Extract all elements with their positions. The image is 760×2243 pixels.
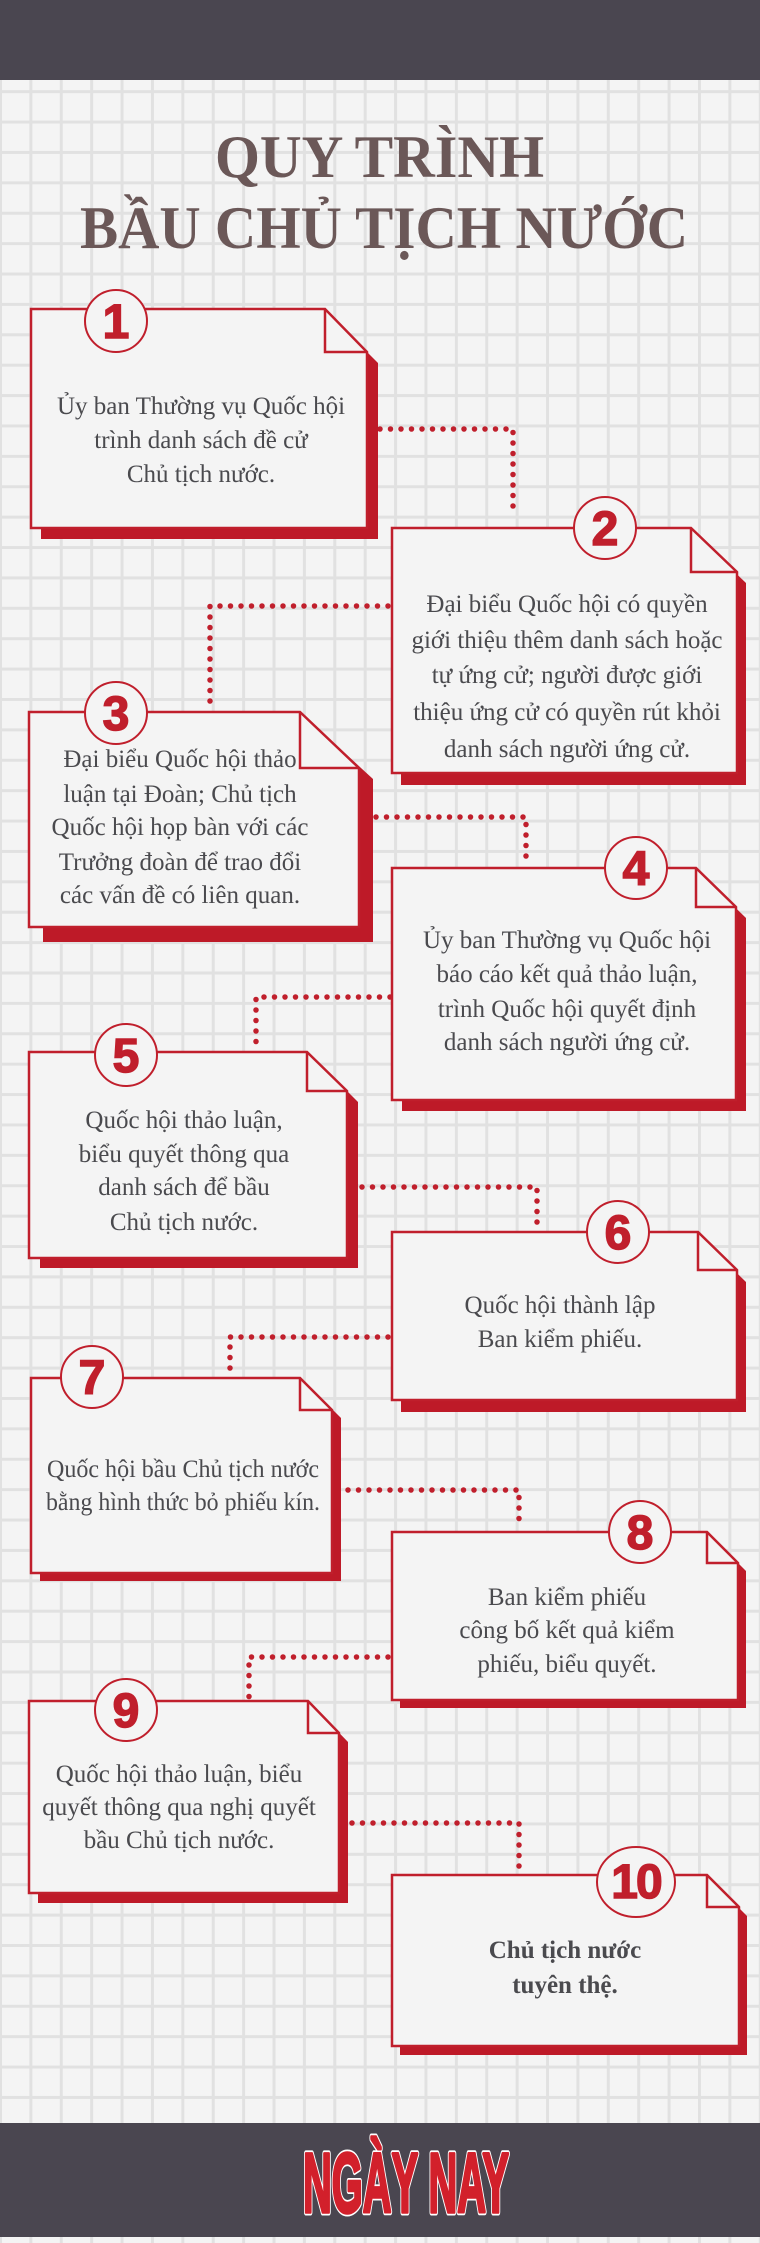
- badge 9: 9: [113, 1685, 139, 1738]
- text 9: Quốc hội thảo luận, biểu: [56, 1761, 303, 1788]
- panel: step 3: [29, 682, 373, 942]
- text 6: Ban kiểm phiếu.: [478, 1326, 642, 1353]
- badge 6: [587, 1201, 649, 1263]
- text 5: biểu quyết thông qua: [79, 1141, 289, 1168]
- text 5: Quốc hội thảo luận,: [85, 1107, 283, 1134]
- text 8: phiếu, biểu quyết.: [477, 1651, 657, 1678]
- panel: step 10: [392, 1847, 747, 2055]
- header bar: [0, 0, 760, 80]
- logo: NGÀY NAY: [303, 2136, 509, 2230]
- text 10: Chủ tịch nước: [489, 1937, 641, 1964]
- connector 7 to 8: [348, 1490, 519, 1527]
- text 7: Quốc hội bầu Chủ tịch nước: [47, 1456, 319, 1483]
- text 5: danh sách để bầu: [98, 1174, 270, 1201]
- text 2: danh sách người ứng cử.: [444, 736, 690, 763]
- text 7: bằng hình thức bỏ phiếu kín.: [46, 1489, 320, 1516]
- badge 8: [609, 1501, 671, 1563]
- panel: step 5: [29, 1024, 358, 1268]
- panel: step 8: [392, 1501, 746, 1708]
- text 9: bầu Chủ tịch nước.: [84, 1827, 274, 1854]
- text 4: danh sách người ứng cử.: [444, 1029, 690, 1056]
- text 1: Chủ tịch nước.: [127, 461, 275, 488]
- text 1: Ủy ban Thường vụ Quốc hội: [57, 392, 345, 420]
- panel: step 7: [31, 1346, 341, 1581]
- panel: step 1: [31, 290, 378, 539]
- text 3: Quốc hội họp bàn với các: [52, 814, 308, 841]
- badge 10: 10: [611, 1856, 661, 1909]
- text 4: trình Quốc hội quyết định: [438, 996, 697, 1023]
- text 9: quyết thông qua nghị quyết: [42, 1794, 316, 1821]
- connector 8 to 9: [249, 1657, 388, 1700]
- text: NGÀY NAY: [303, 2136, 509, 2230]
- connector 2 to 3: [210, 606, 388, 707]
- text 2: thiệu ứng cử có quyền rút khỏi: [413, 699, 721, 726]
- text 6: Quốc hội thành lập: [465, 1292, 655, 1319]
- badge 7: [61, 1346, 123, 1408]
- text 3: Trưởng đoàn để trao đổi: [59, 849, 301, 876]
- connector 3 to 4: [376, 817, 526, 863]
- text 2: giới thiệu thêm danh sách hoặc: [411, 627, 723, 654]
- badge 2: 2: [592, 503, 618, 556]
- panel: step 6: [392, 1201, 746, 1412]
- connector 1 to 2: [380, 429, 513, 516]
- text 2: tự ứng cử; người được giới: [432, 662, 702, 689]
- text 8: công bố kết quả kiểm: [459, 1617, 675, 1644]
- title: BẦU CHỦ TỊCH NƯỚC: [80, 195, 688, 261]
- connector 9 to 10: [352, 1823, 519, 1870]
- badge 9: [95, 1679, 157, 1741]
- badge 4: [605, 837, 667, 899]
- badge 3: [85, 682, 147, 744]
- text 4: Ủy ban Thường vụ Quốc hội: [423, 926, 711, 954]
- text 10: tuyên thệ.: [512, 1972, 618, 1999]
- badge 1: 1: [103, 296, 129, 349]
- connector 4 to 5: [256, 997, 390, 1043]
- badge 8: 8: [627, 1507, 653, 1560]
- badge 6: 6: [605, 1207, 631, 1260]
- text 1: trình danh sách đề cử: [94, 427, 309, 454]
- text: NGÀY NAY: [303, 2136, 509, 2230]
- badge 5: 5: [113, 1030, 139, 1083]
- badge 2: [574, 497, 636, 559]
- badge 1: [85, 290, 147, 352]
- badge 10: [597, 1847, 675, 1917]
- badge 7: 7: [79, 1352, 105, 1405]
- badge 3: 3: [103, 688, 129, 741]
- text 3: Đại biểu Quốc hội thảo: [63, 746, 297, 773]
- text 8: Ban kiểm phiếu: [488, 1584, 647, 1611]
- text 3: các vấn đề có liên quan.: [60, 882, 300, 909]
- panel: step 9: [29, 1679, 348, 1903]
- text 5: Chủ tịch nước.: [110, 1209, 258, 1236]
- text 4: báo cáo kết quả thảo luận,: [436, 961, 698, 988]
- connector 5 to 6: [362, 1187, 537, 1228]
- title: QUY TRÌNH: [215, 124, 544, 190]
- title: [80, 124, 688, 261]
- footer bar: [0, 2123, 760, 2237]
- panel: step 4: [392, 837, 746, 1111]
- text 2: Đại biểu Quốc hội có quyền: [426, 591, 708, 618]
- panel: step 2: [392, 497, 746, 785]
- text 3: luận tại Đoàn; Chủ tịch: [63, 781, 297, 808]
- badge 4: 4: [623, 843, 650, 896]
- connector 6 to 7: [230, 1337, 388, 1373]
- badge 5: [95, 1024, 157, 1086]
